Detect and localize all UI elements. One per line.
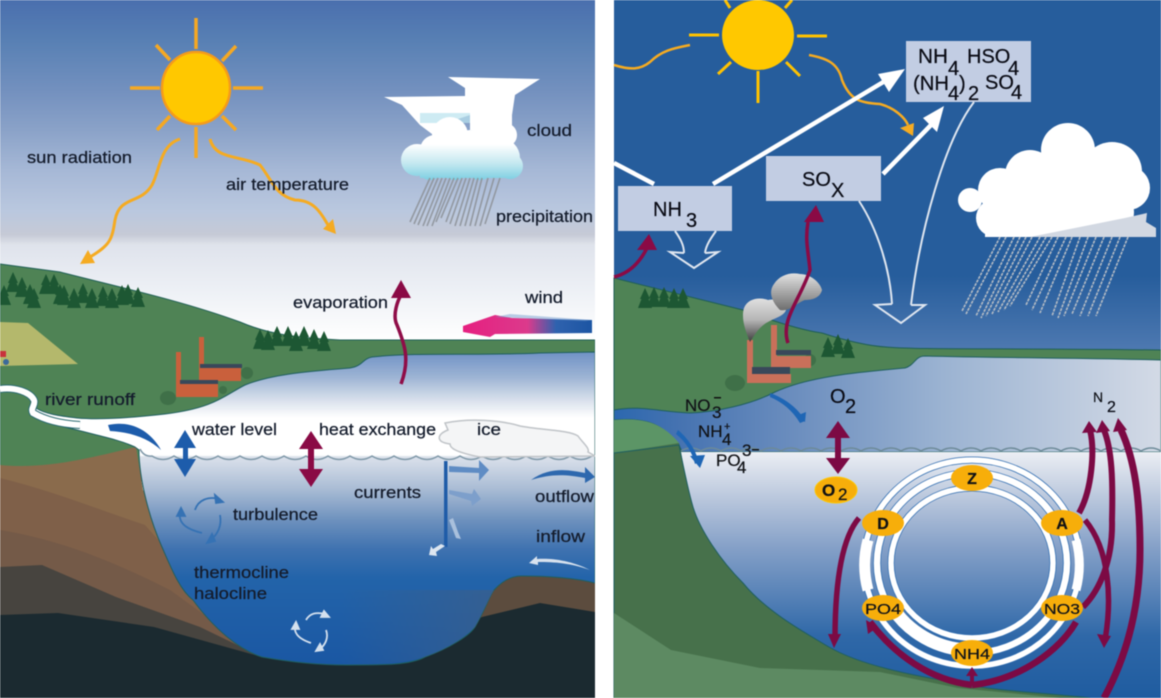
arrows: currents profile	[429, 460, 489, 556]
arrow: heat exchange	[299, 431, 323, 487]
factory	[725, 325, 816, 391]
line: NH3 from left	[614, 163, 654, 184]
farm field	[0, 322, 78, 366]
node: A	[1041, 510, 1083, 536]
box: ammonium sulfates: SO	[985, 72, 1014, 94]
box: ammonium sulfates: HSO	[967, 46, 1010, 68]
arrow: river runoff flow	[108, 424, 161, 450]
label: thermocline: thermocline	[194, 564, 289, 582]
node: D	[862, 510, 904, 536]
arrow: water level	[174, 430, 196, 477]
trees at shore	[253, 326, 331, 351]
rain cloud	[958, 123, 1156, 237]
node: NH4: NH4	[954, 646, 990, 663]
arrows: inflow	[676, 393, 806, 468]
maroon arrow: N2 from sediment	[1104, 418, 1140, 698]
arrow: NH3 to sulfates	[713, 69, 905, 184]
label: inflow: inflow	[536, 528, 585, 546]
sky	[614, 0, 1161, 355]
box: NH3: NH	[653, 199, 682, 221]
maroon arrow: algae sink	[1085, 520, 1111, 648]
label: NO3-: 3	[712, 403, 721, 422]
label: evaporation: evaporation	[293, 294, 388, 312]
box: ammonium sulfates: (NH	[913, 73, 949, 95]
label: N2: N	[1093, 389, 1103, 405]
icon: turbulence swirl	[177, 495, 223, 543]
node: PO4	[862, 595, 904, 621]
label: halocline: halocline	[194, 585, 267, 603]
label: N2	[1093, 389, 1116, 416]
label: O2	[830, 386, 856, 418]
label: NH4+: 4	[722, 430, 731, 449]
label: PO43-: PO	[716, 451, 741, 470]
label: wind: wind	[524, 289, 563, 307]
node: Z: Z	[967, 471, 977, 488]
maroon arrow: N2 from algae	[1079, 421, 1097, 513]
node: O2	[815, 477, 857, 504]
box: ammonium sulfates: )	[959, 73, 966, 95]
arrow: outflow	[531, 467, 595, 483]
sky	[0, 0, 595, 340]
label: air temperature: air temperature	[226, 176, 349, 194]
box: ammonium sulfates: 2	[968, 83, 979, 105]
node: NO3	[1041, 595, 1083, 621]
box: ammonium sulfates: 4	[1008, 58, 1019, 80]
node: PO4: PO4	[865, 601, 901, 618]
node: D: D	[877, 516, 889, 533]
deep shadow near ridge	[392, 590, 494, 662]
label: N2: 2	[1107, 399, 1116, 416]
box: NH3: 3	[686, 210, 697, 232]
river and upper lake water	[614, 356, 1161, 452]
label: water level: water level	[191, 421, 277, 439]
icon: deep water swirl	[292, 611, 329, 651]
river bank	[614, 419, 679, 453]
lighter lake bed	[614, 613, 1060, 698]
label: ice: ice	[477, 421, 501, 439]
label: O2: O	[830, 386, 846, 408]
arrow: deposition to lake	[859, 102, 974, 323]
trees at shore	[821, 334, 855, 358]
label: heat exchange: heat exchange	[319, 421, 436, 439]
label: PO43-	[716, 441, 759, 477]
box: ammonium sulfates: 4	[948, 83, 959, 105]
label: currents: currents	[354, 484, 421, 502]
box: ammonium sulfates: 4	[1011, 82, 1022, 104]
arrow: sun radiation	[80, 139, 180, 264]
label: PO43-: 3	[742, 441, 751, 460]
rain	[410, 178, 500, 226]
node: A: A	[1056, 516, 1068, 533]
trees on hill	[638, 287, 690, 308]
label: cloud: cloud	[527, 122, 572, 140]
rock strata	[0, 447, 595, 698]
lower bank	[614, 443, 830, 698]
sun	[689, 0, 827, 103]
node: O2: O	[822, 481, 835, 500]
box: SOx: X	[831, 180, 844, 202]
label: NH4+: +	[724, 421, 730, 433]
node: O2: 2	[838, 485, 847, 504]
ice sheet	[439, 420, 595, 457]
green hillside	[0, 264, 595, 480]
label: NH4+	[698, 421, 731, 449]
label: turbulence: turbulence	[233, 506, 318, 524]
lake water	[30, 352, 595, 665]
trees on hill	[0, 272, 145, 308]
tractor	[0, 351, 9, 365]
box: SOx: SO	[802, 169, 831, 191]
label: NO3-: NO	[685, 396, 710, 415]
arrow: evaporation	[391, 280, 411, 384]
label: NH4+: NH	[698, 422, 723, 441]
storm cloud	[384, 77, 540, 180]
label: O2: 2	[845, 396, 856, 418]
arrow: wind	[463, 314, 592, 337]
arrow: SOx to sulfates	[883, 106, 944, 174]
lower lake water	[681, 452, 1161, 698]
smoke plumes	[743, 273, 822, 342]
arrow: oxygen exchange	[826, 421, 850, 474]
sun	[130, 18, 263, 158]
water surface waves	[681, 448, 1161, 451]
box: ammonium sulfates: 4	[948, 58, 959, 80]
arrow: inflow	[529, 556, 590, 570]
arrow: ammonia emission	[614, 234, 657, 277]
arrow: NH3 deposition	[670, 231, 718, 268]
panel: nutrient cycle processes	[614, 0, 1161, 698]
label: NO3-	[685, 396, 721, 422]
label: PO43-: 4	[737, 458, 746, 477]
rain	[962, 237, 1128, 318]
label: sun radiation: sun radiation	[27, 149, 132, 167]
water surface waves	[140, 449, 592, 460]
label: precipitation: precipitation	[496, 208, 593, 226]
nutrient cycle ring	[864, 460, 1080, 666]
maroon arrows: sediment release	[866, 620, 1076, 685]
land	[614, 278, 1161, 470]
arrow: solar radiation left	[614, 45, 690, 68]
box: ammonium sulfates	[906, 41, 1031, 105]
box: SOx	[766, 156, 881, 202]
label: river runoff: river runoff	[45, 391, 135, 409]
label: outflow: outflow	[535, 488, 594, 506]
river runoff channel	[0, 389, 80, 425]
arrow: sulfur emission	[786, 205, 824, 343]
arrow: air temperature	[210, 139, 336, 234]
arrow: solar radiation right	[809, 55, 914, 136]
node: Z	[951, 465, 993, 491]
node: NH4	[951, 640, 993, 666]
panel: physical lake processes	[0, 0, 595, 698]
maroon arrow: detritus sink	[828, 518, 859, 648]
lake bed	[614, 445, 1090, 698]
maroon arrow: N2 from nitrate	[1083, 420, 1112, 607]
box: NH3	[618, 186, 732, 232]
node: NO3: NO3	[1044, 601, 1080, 618]
factory	[160, 337, 253, 405]
box: ammonium sulfates: NH	[918, 46, 948, 68]
